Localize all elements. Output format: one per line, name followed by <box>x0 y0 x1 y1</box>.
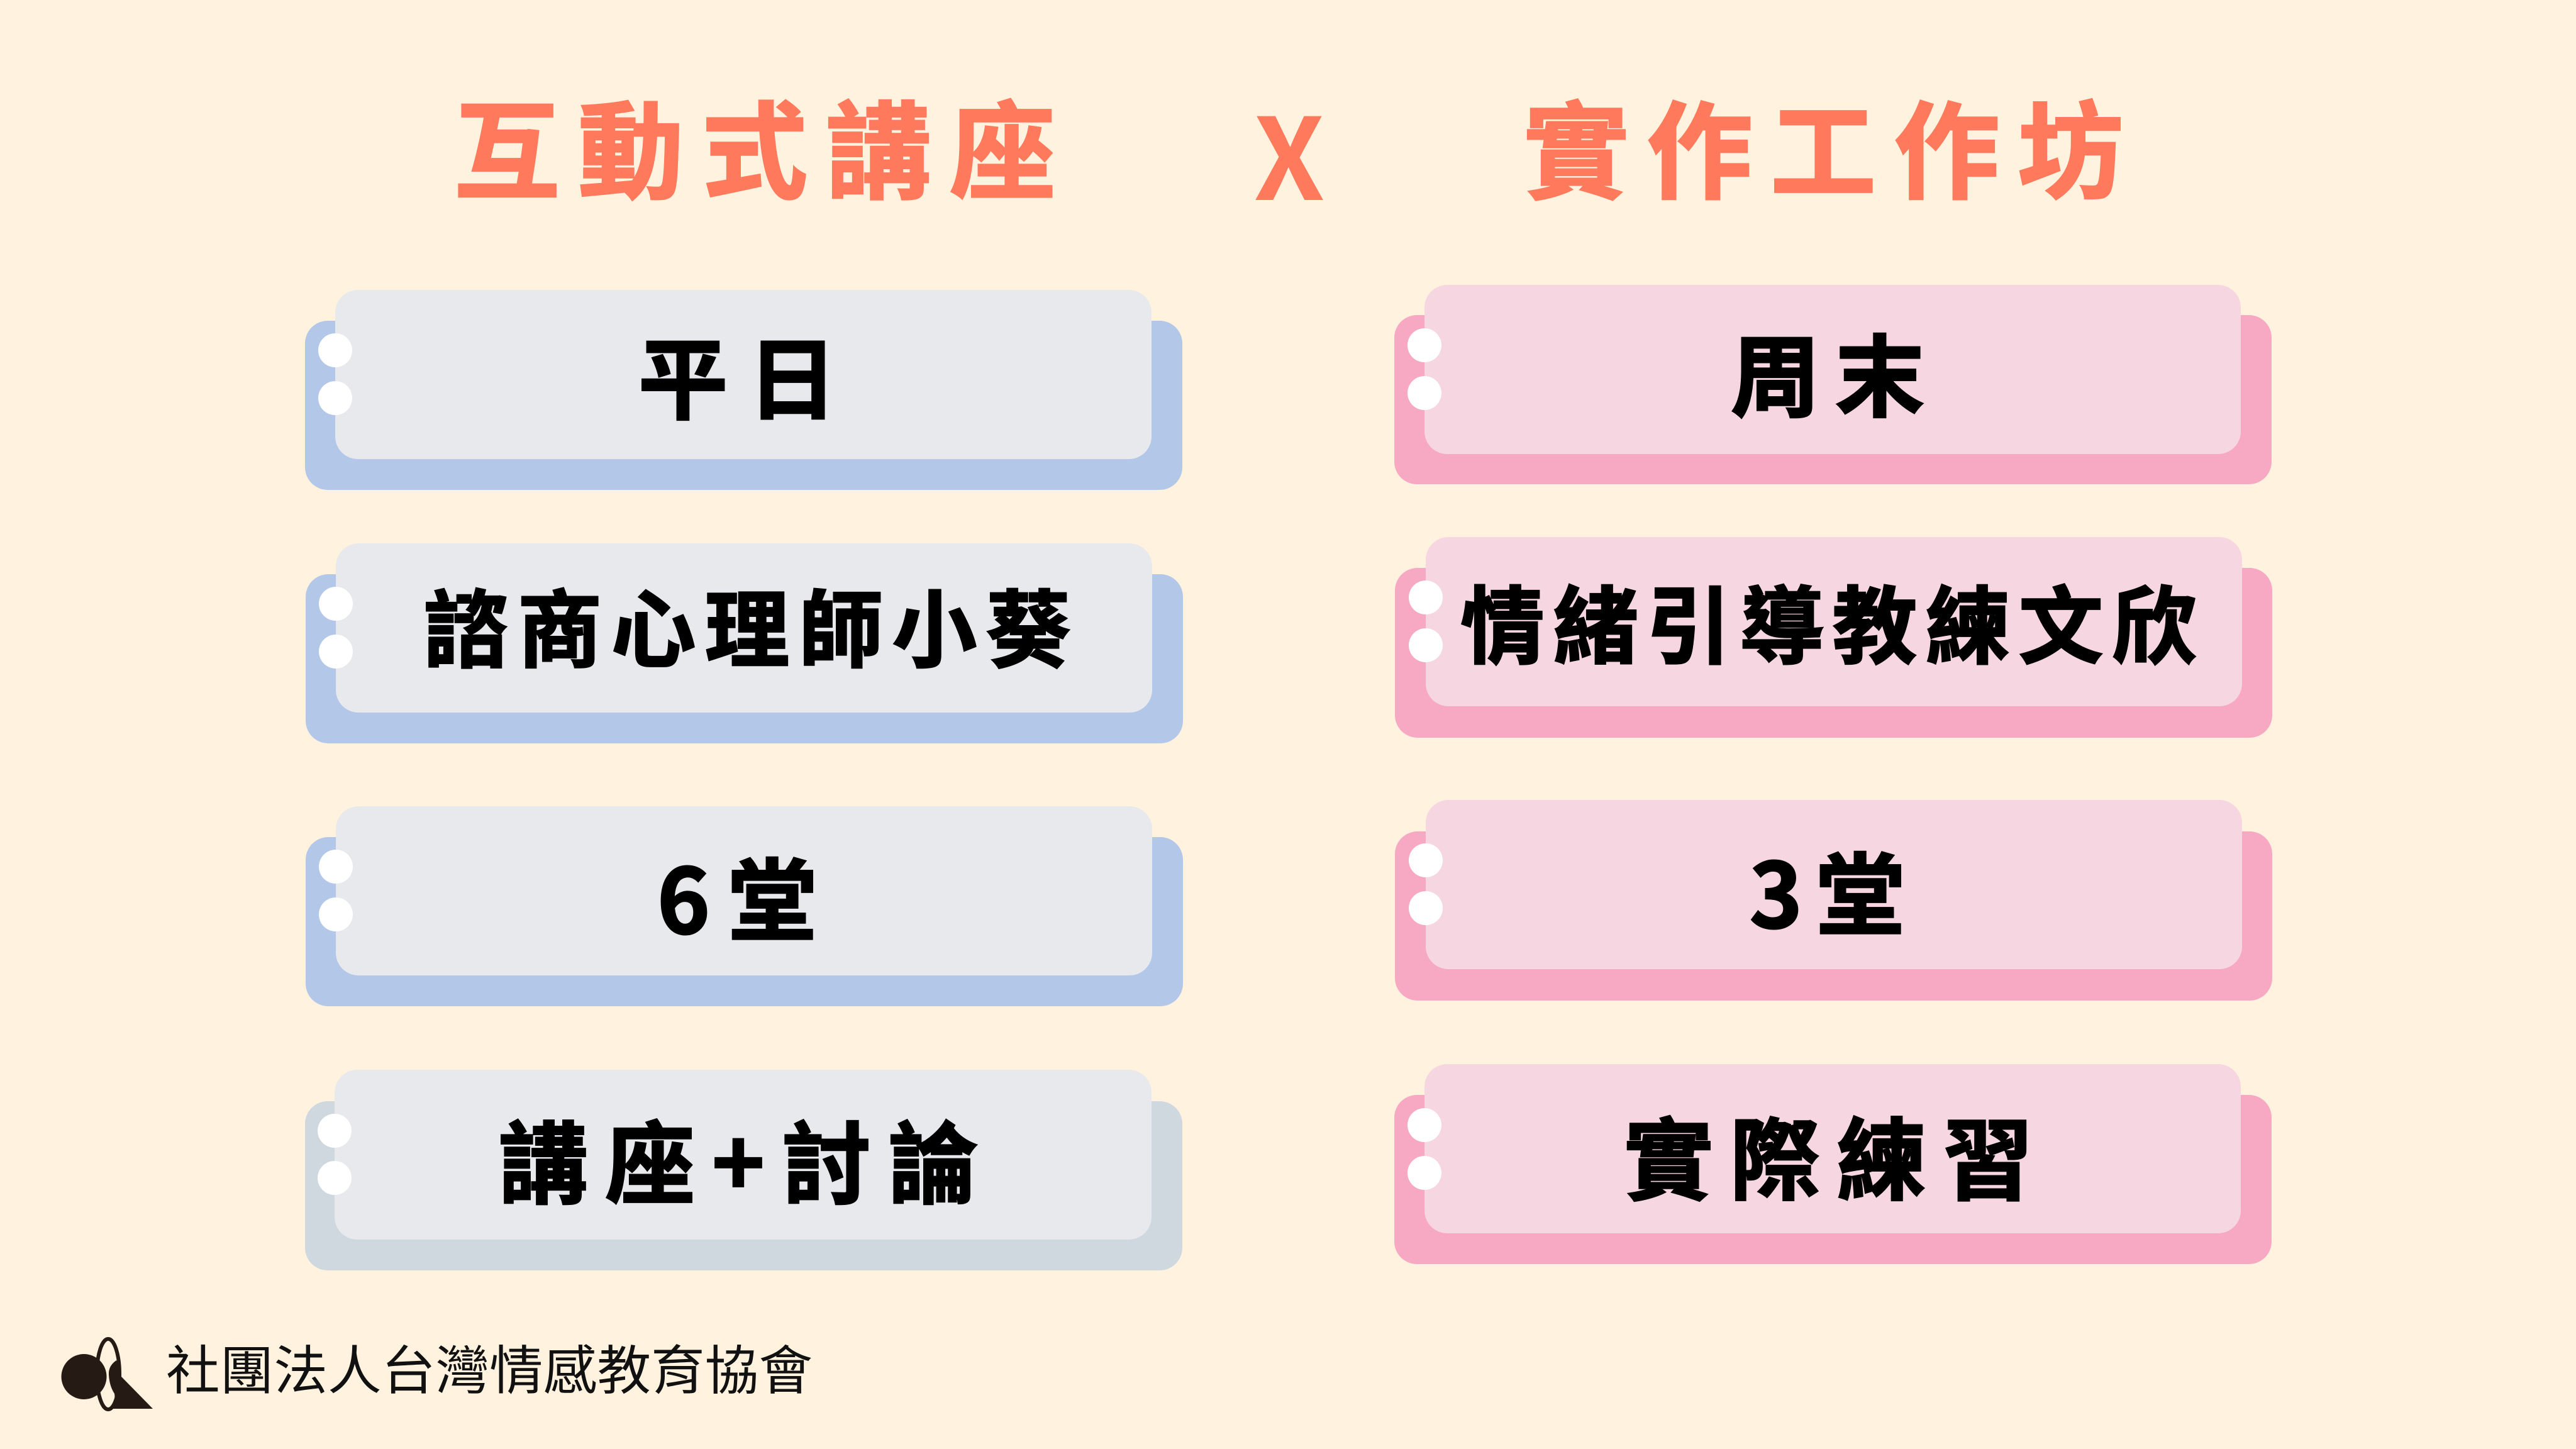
title: interactive lecture: 互動式講座 <box>454 68 1055 221</box>
panel: workshop timing card: 周末 <box>1731 306 1924 435</box>
title: hands-on workshop: 實作工作坊 <box>1523 68 2123 221</box>
panel: workshop format card: 實際練習 <box>1624 1089 2033 1218</box>
panel: workshop sessions card <box>1395 800 2272 1001</box>
panel: lecture instructor card <box>306 543 1183 743</box>
panel: workshop sessions card: 3堂 <box>1750 824 1905 953</box>
panel: workshop format card <box>1394 1064 2272 1264</box>
panel: lecture sessions card <box>306 806 1183 1006</box>
icon: association logo <box>62 1339 153 1409</box>
panel: workshop instructor card: 情緒引導教練文欣 <box>1460 559 2196 681</box>
footer: association name: 社團法人台灣情感教育協會 <box>166 1329 813 1405</box>
panel: lecture timing card <box>305 290 1182 490</box>
panel: lecture instructor card: 諮商心理師小葵 <box>424 563 1070 685</box>
panel: workshop instructor card <box>1395 537 2272 738</box>
title: X separator: X <box>1254 69 1324 233</box>
panel: workshop timing card <box>1394 285 2272 484</box>
panel: lecture format card <box>305 1070 1182 1270</box>
panel: lecture format card: 講座+討論 <box>499 1092 978 1222</box>
panel: lecture timing card: 平日 <box>638 308 837 438</box>
panel: lecture sessions card: 6堂 <box>657 830 817 959</box>
